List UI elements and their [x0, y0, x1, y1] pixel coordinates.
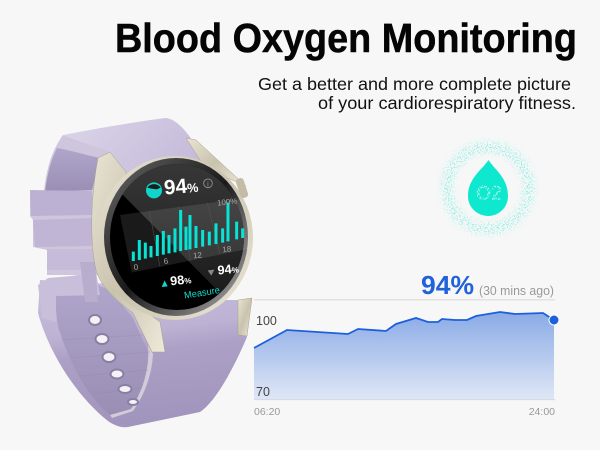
- icon: oxygen droplet with particle ring: [447, 147, 529, 229]
- data line: [254, 312, 554, 348]
- end marker: [549, 315, 559, 325]
- info icon: i: [207, 179, 209, 188]
- case ring: [97, 156, 253, 320]
- x axis labels: [254, 406, 555, 418]
- chart axis labels: 0: [133, 263, 139, 272]
- max reading: 98%: [170, 272, 192, 288]
- icon: oxygen droplet with particle ring: O2: [476, 182, 502, 205]
- chart panel: [120, 198, 251, 273]
- crown: [235, 177, 249, 199]
- x axis labels: 24:00: [529, 406, 555, 418]
- case lugs: [92, 138, 252, 352]
- chart axis labels: 12: [193, 250, 203, 260]
- screen: [110, 164, 248, 310]
- current reading: [421, 270, 554, 300]
- top strap: [63, 118, 205, 178]
- bar chart: [133, 203, 243, 261]
- y axis labels: 70: [256, 385, 270, 399]
- strap holes: [89, 315, 138, 405]
- chart axis labels: 100%: [217, 197, 238, 208]
- lower strap with holes: [38, 262, 247, 427]
- chart axis labels: 18: [222, 244, 232, 254]
- oxygen icon: [146, 182, 162, 198]
- back strap: [30, 135, 112, 275]
- current reading: (30 mins ago): [479, 284, 554, 298]
- watch: [30, 118, 260, 427]
- chart axis labels: [133, 197, 238, 272]
- subtitle: Get a better and more complete picture: [258, 74, 571, 94]
- subtitle: [258, 74, 576, 113]
- y axis labels: 100: [256, 314, 277, 328]
- min reading: 94%: [217, 261, 239, 278]
- subtitle: of your cardiorespiratory fitness.: [318, 93, 576, 113]
- y axis labels: [256, 314, 277, 399]
- area under line: [254, 312, 554, 400]
- current reading: 94%: [421, 270, 474, 300]
- measure label: Measure: [183, 285, 221, 302]
- chart axis labels: 6: [163, 257, 169, 266]
- oxygen line chart: [254, 270, 559, 418]
- bezel: [104, 158, 248, 316]
- reading: 94%: [163, 174, 199, 200]
- x axis labels: 06:20: [254, 406, 280, 418]
